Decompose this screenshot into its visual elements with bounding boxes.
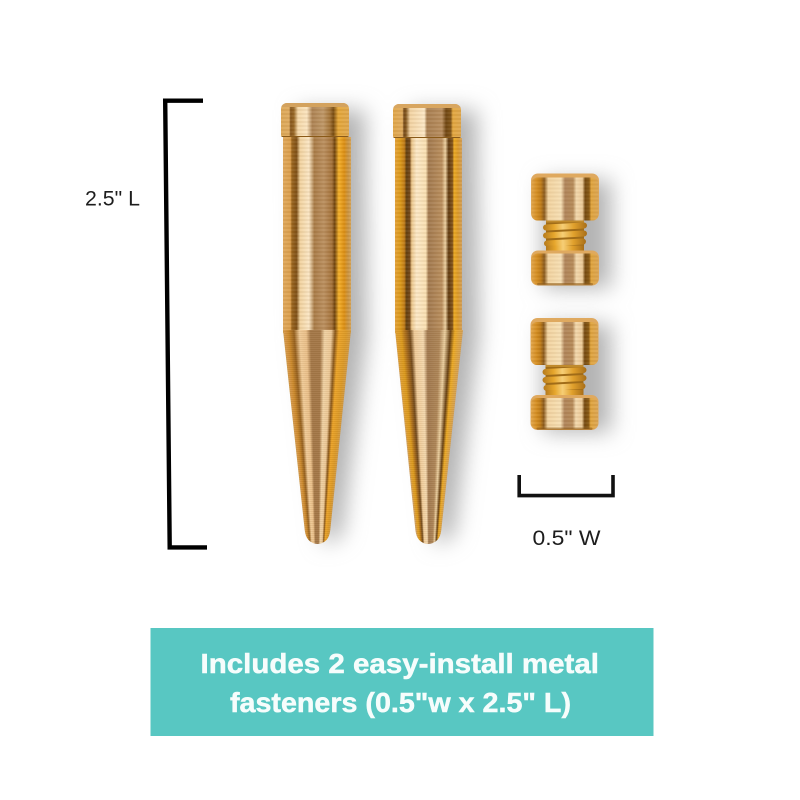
pin 1 taper bbox=[283, 330, 351, 544]
screw post 1 bbox=[531, 174, 599, 286]
caption text line 1: Includes 2 easy-install metal bbox=[200, 648, 599, 679]
pin 2 body bbox=[394, 138, 462, 333]
screw post 2 bbox=[530, 318, 598, 430]
width label: 0.5" W bbox=[532, 527, 601, 550]
pin 2 cap bbox=[393, 104, 461, 138]
fastener pin 2 bbox=[393, 104, 463, 544]
fastener pin 1 bbox=[281, 103, 351, 544]
pin 2 taper bbox=[395, 330, 463, 544]
pin 1 body bbox=[282, 137, 351, 333]
pin 1 cap bbox=[281, 103, 349, 137]
caption text line 2: fasteners (0.5"w x 2.5" L) bbox=[230, 687, 571, 718]
height label: 2.5" L bbox=[85, 188, 140, 210]
